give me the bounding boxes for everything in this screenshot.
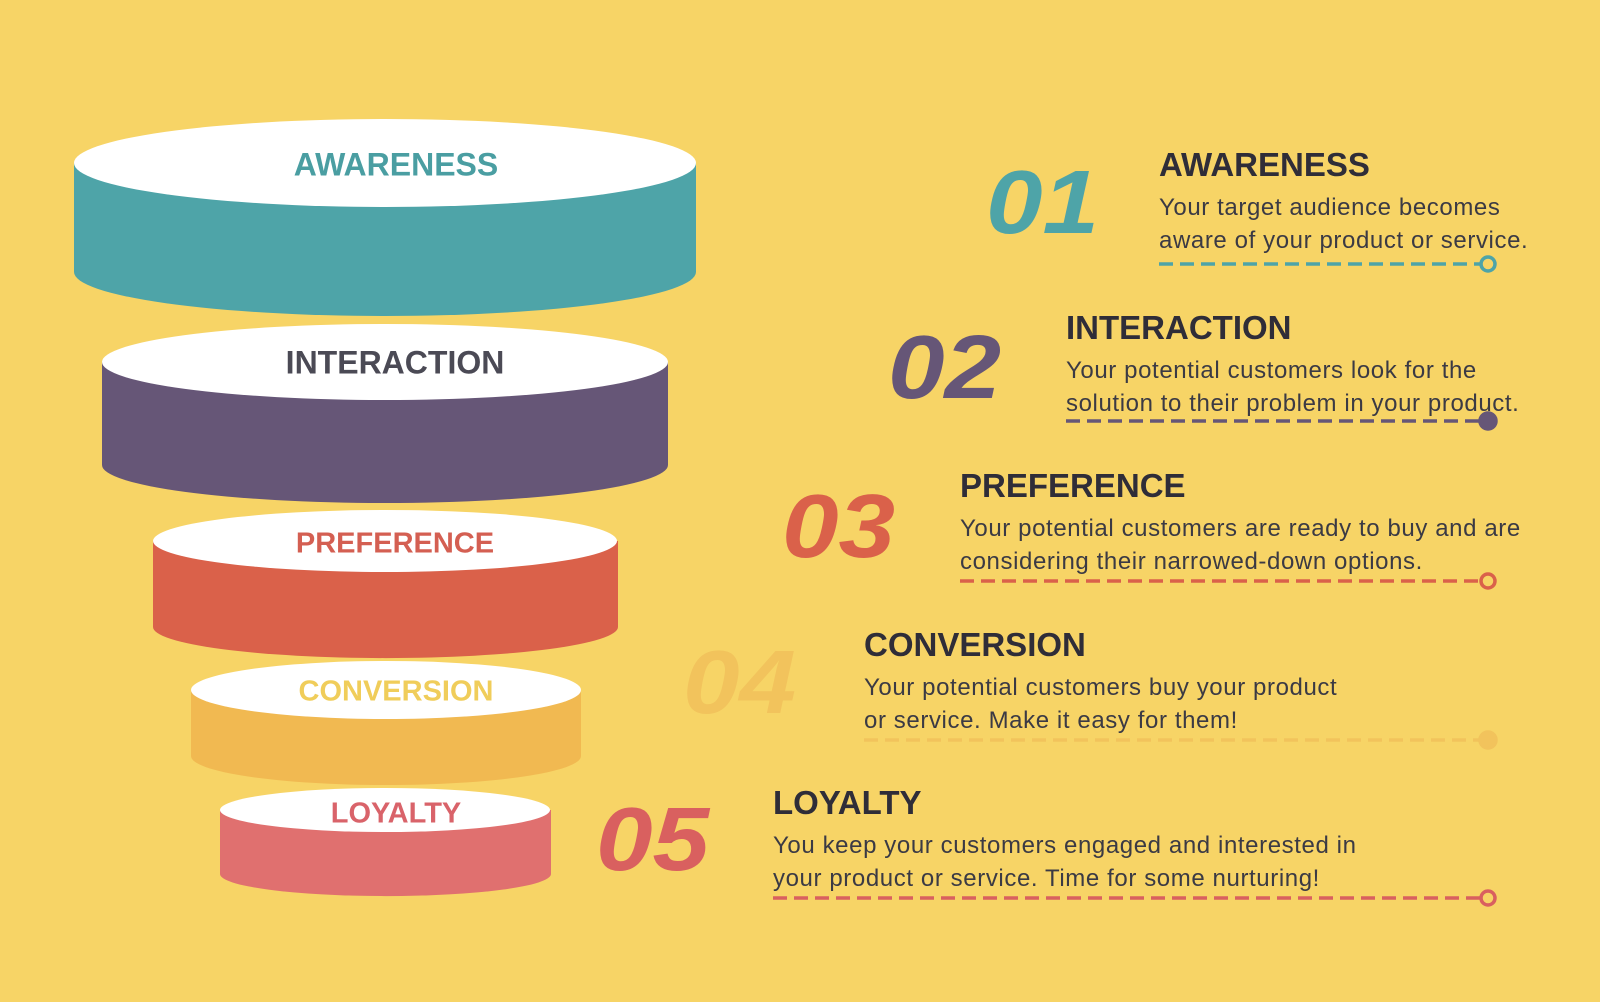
funnel layer: loyalty — [220, 788, 551, 896]
number 03: 03 — [782, 477, 895, 577]
funnel layer: interaction — [102, 324, 668, 503]
text: loyalty — [773, 784, 1357, 892]
funnel layer: interaction: INTERACTION — [286, 344, 504, 380]
text: loyalty: LOYALTY — [773, 784, 922, 821]
text: awareness: aware of your product or service. — [1159, 227, 1528, 254]
text: loyalty: your product or service. Time for some nurturing! — [773, 865, 1320, 892]
text: conversion: Your potential customers buy your product — [864, 674, 1337, 701]
number 02: 02 — [888, 318, 1001, 418]
text: awareness — [1159, 146, 1528, 254]
text: loyalty: You keep your customers engaged and interested in — [773, 832, 1357, 859]
text: conversion: CONVERSION — [864, 626, 1086, 663]
text: interaction: solution to their problem in your product. — [1066, 390, 1519, 417]
text: conversion — [864, 626, 1337, 734]
text: interaction: INTERACTION — [1066, 309, 1292, 346]
funnel layer: awareness: AWARENESS — [294, 146, 498, 182]
text: preference: Your potential customers are ready to buy and are — [960, 515, 1521, 542]
funnel layer: preference — [153, 510, 618, 658]
connector end dots — [1480, 257, 1496, 905]
text: conversion: or service. Make it easy for them! — [864, 707, 1238, 734]
text: awareness: AWARENESS — [1159, 146, 1370, 183]
funnel layer: conversion: CONVERSION — [299, 676, 493, 708]
dashed connector lines — [773, 264, 1480, 898]
number 04: 04 — [683, 633, 796, 733]
text: preference: considering their narrowed-down options. — [960, 548, 1423, 575]
text: interaction — [1066, 309, 1519, 417]
text: awareness: Your target audience becomes — [1159, 194, 1500, 221]
funnel layer: loyalty: LOYALTY — [331, 798, 461, 830]
text: preference: PREFERENCE — [960, 467, 1186, 504]
number 05: 05 — [596, 790, 709, 890]
funnel layer: conversion — [191, 661, 581, 785]
funnel layer: awareness — [74, 119, 696, 316]
text: preference — [960, 467, 1521, 575]
number 01: 01 — [986, 153, 1099, 253]
funnel layer: preference: PREFERENCE — [296, 528, 494, 560]
text: interaction: Your potential customers look for the — [1066, 357, 1477, 384]
